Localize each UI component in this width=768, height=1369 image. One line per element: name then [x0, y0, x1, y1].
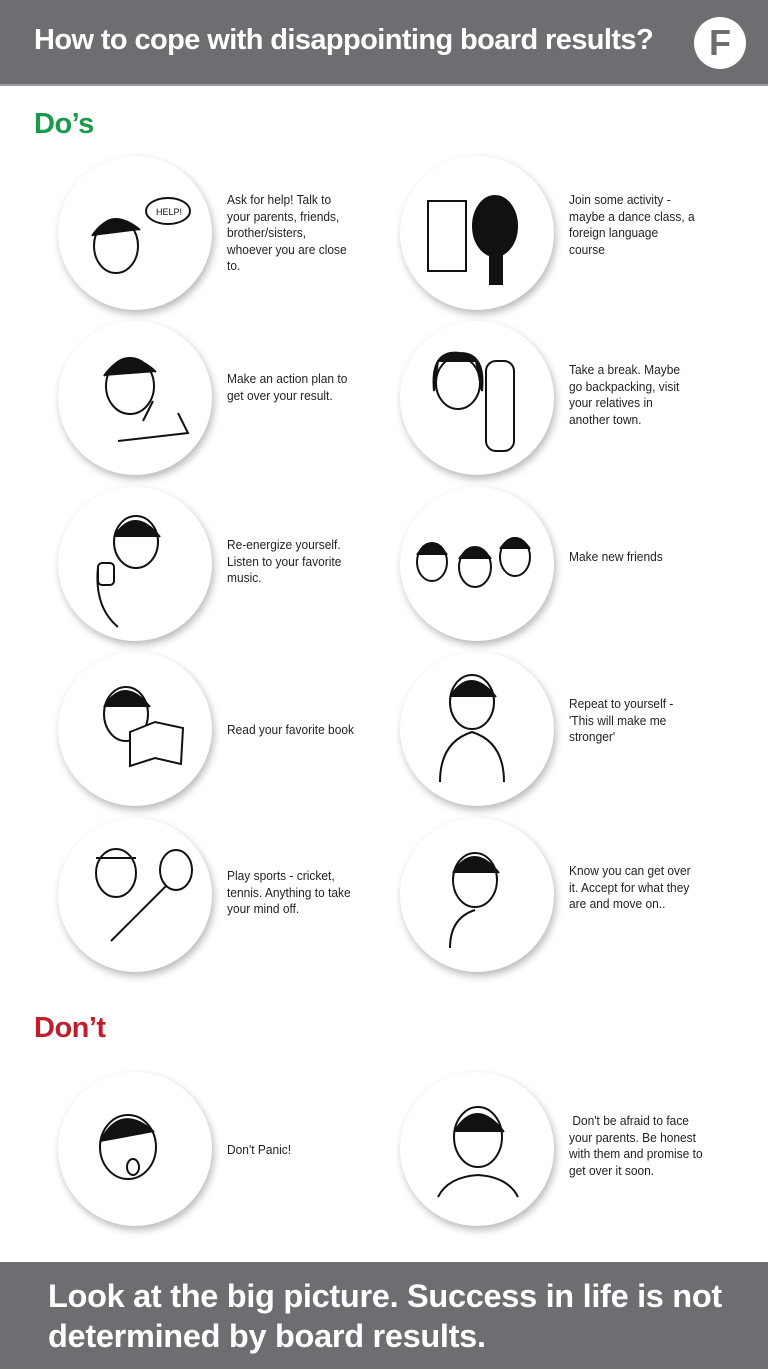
illustration: reading — [58, 652, 212, 806]
footer text: Look at the big picture. Success in life is not determined by board results. — [48, 1278, 722, 1354]
item: re-energize — [56, 486, 341, 650]
item: join activity — [398, 156, 695, 318]
text: Make an action plan to get over your result. — [227, 371, 347, 403]
illustration: writing — [58, 321, 212, 475]
illustration: panic — [58, 1072, 212, 1226]
illustration: badminton — [58, 818, 212, 972]
icon: logo: F — [709, 22, 731, 63]
icon: logo — [694, 17, 746, 69]
text: Re-energize yourself. Listen to your favorite music. — [227, 537, 341, 585]
illustration: activity — [400, 156, 554, 310]
text: Take a break. Maybe go backpacking, visit your relatives in another town. — [569, 362, 680, 427]
text: Don't be afraid to face your parents. Be honest with them and promise to get over it soon. — [569, 1113, 703, 1178]
text: Read your favorite book — [227, 722, 354, 737]
item: accept — [398, 818, 691, 980]
text: Play sports - cricket, tennis. Anything to take your mind off. — [227, 868, 351, 916]
item: ask for help — [56, 156, 347, 318]
item: new friends — [398, 486, 663, 650]
header bar — [0, 0, 768, 86]
illustration: music — [58, 487, 212, 641]
item: repeat — [398, 652, 673, 814]
illustration: honest — [400, 1072, 554, 1226]
heading: Don't: Don’t — [34, 1012, 106, 1044]
text: Know you can get over it. Accept for what they are and move on.. — [569, 863, 691, 911]
illustration: backpack — [400, 321, 554, 475]
illustration: help — [58, 156, 212, 310]
illustration: friends — [400, 487, 554, 641]
text: Ask for help! Talk to your parents, friends, brother/sisters, whoever you are close to. — [227, 192, 347, 273]
item: take a break — [398, 320, 680, 484]
footer banner — [0, 1262, 768, 1369]
text: Repeat to yourself - 'This will make me stronger' — [569, 696, 673, 744]
illustration: stronger — [400, 652, 554, 806]
item: action plan — [56, 320, 347, 484]
text: Make new friends — [569, 549, 663, 564]
text: Join some activity - maybe a dance class, a foreign language course — [569, 192, 695, 257]
item: don't panic — [56, 1072, 291, 1234]
item: sports — [56, 818, 351, 980]
title: How to cope with disappointing board results? — [34, 24, 653, 56]
illustration: help: HELP! — [156, 207, 182, 217]
illustration: thinking — [400, 818, 554, 972]
heading: Do's: Do’s — [34, 108, 94, 140]
text: Don't Panic! — [227, 1142, 291, 1157]
item: read book — [56, 652, 354, 814]
item: parents — [398, 1072, 703, 1234]
